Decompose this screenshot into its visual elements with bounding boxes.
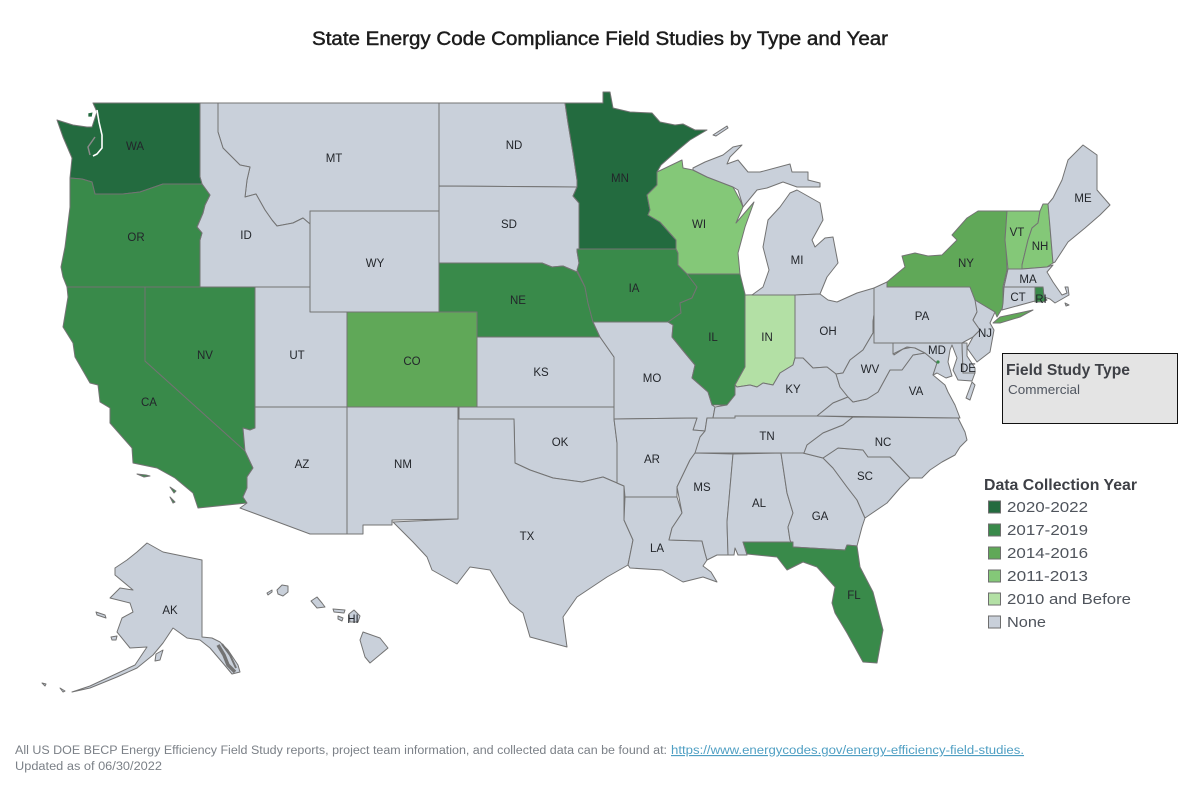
state: Maryland: MD bbox=[928, 345, 946, 357]
state: Missouri bbox=[593, 322, 715, 431]
state: Connecticut bbox=[1002, 287, 1035, 310]
state: Indiana bbox=[735, 294, 795, 387]
title: State Energy Code Compliance Field Studies by Type and Year bbox=[312, 29, 889, 50]
state: Washington: WA bbox=[126, 141, 144, 153]
state: Alabama bbox=[727, 453, 793, 555]
state: Oklahoma: OK bbox=[552, 437, 569, 449]
state: Kansas: KS bbox=[533, 367, 549, 379]
state: Wisconsin bbox=[647, 160, 754, 274]
state: Maryland bbox=[893, 343, 975, 381]
state: Idaho bbox=[197, 103, 310, 287]
state: Connecticut: CT bbox=[1010, 292, 1026, 304]
panel: field study type filter bbox=[1002, 354, 1178, 424]
legend item: 2011-2013: 2011-2013 bbox=[1007, 568, 1088, 585]
state: Utah bbox=[255, 287, 347, 407]
state: Texas: TX bbox=[520, 531, 535, 543]
state: Michigan: MI bbox=[791, 255, 803, 267]
state: Maine bbox=[1048, 145, 1110, 263]
state: New York bbox=[887, 211, 1033, 323]
state: North Carolina bbox=[803, 417, 967, 478]
state: Mississippi bbox=[669, 453, 733, 560]
state: South Carolina bbox=[823, 448, 910, 518]
state: Colorado bbox=[347, 312, 477, 407]
state: California bbox=[63, 287, 253, 508]
state: California: CA bbox=[141, 397, 157, 409]
state: Kentucky bbox=[710, 358, 848, 418]
state: Iowa bbox=[577, 249, 697, 322]
state: Minnesota bbox=[565, 92, 707, 249]
state: Massachusetts: MA bbox=[1019, 274, 1037, 286]
legend item: None bbox=[988, 614, 1046, 631]
state: Nevada bbox=[145, 287, 255, 451]
state: Arizona bbox=[240, 407, 347, 534]
state: New Jersey bbox=[967, 300, 995, 362]
state: Wyoming bbox=[310, 211, 439, 312]
state: Montana bbox=[218, 103, 439, 226]
legend item: 2014-2016: 2014-2016 bbox=[1007, 545, 1088, 562]
choropleth map of US states bbox=[42, 92, 1110, 692]
state: Massachusetts bbox=[1004, 265, 1069, 306]
state: Nebraska: NE bbox=[510, 295, 526, 307]
state: Hawaii bbox=[267, 585, 388, 663]
state: Idaho: ID bbox=[240, 230, 252, 242]
state: Oregon bbox=[61, 178, 210, 287]
state: Wisconsin: WI bbox=[692, 219, 706, 231]
state: Minnesota: MN bbox=[611, 173, 629, 185]
filter value: Commercial bbox=[1008, 383, 1080, 397]
state: Colorado: CO bbox=[403, 356, 421, 368]
state: Florida bbox=[743, 542, 883, 663]
state: Kansas bbox=[477, 337, 614, 407]
state: Florida: FL bbox=[847, 590, 861, 602]
state: Arkansas: AR bbox=[644, 454, 660, 466]
state: Oregon: OR bbox=[127, 232, 145, 244]
state: Arizona: AZ bbox=[295, 459, 309, 471]
state: Oklahoma bbox=[459, 407, 617, 483]
legend heading: Data Collection Year bbox=[984, 477, 1137, 494]
state: Virginia: VA bbox=[909, 386, 924, 398]
state: Nevada: NV bbox=[197, 350, 213, 362]
state: Pennsylvania bbox=[874, 282, 985, 343]
state: West Virginia bbox=[836, 315, 925, 402]
state: Maine: ME bbox=[1074, 193, 1092, 205]
state: Nebraska bbox=[439, 263, 600, 337]
state: Montana: MT bbox=[326, 153, 342, 165]
source link: https://www.energycodes.gov/energy-efficiency-field-studies. bbox=[671, 745, 1024, 757]
state: Vermont: VT bbox=[1010, 227, 1024, 239]
state: Louisiana bbox=[624, 497, 717, 582]
update date: Updated as of 06/30/2022 bbox=[15, 761, 162, 773]
state: Mississippi: MS bbox=[693, 482, 711, 494]
state: Missouri: MO bbox=[643, 373, 661, 385]
state: New Mexico bbox=[347, 407, 458, 534]
state: South Dakota bbox=[439, 186, 579, 272]
state: New Mexico: NM bbox=[394, 459, 412, 471]
state: West Virginia: WV bbox=[861, 364, 880, 376]
state: Ohio bbox=[795, 288, 874, 374]
state: Alaska: AK bbox=[162, 605, 178, 617]
legend item: 2017-2019: 2017-2019 bbox=[1007, 522, 1088, 539]
state: Hawaii: HI bbox=[347, 614, 359, 626]
legend item: None: None bbox=[1007, 614, 1046, 631]
state: Tennessee bbox=[695, 416, 853, 453]
state: Pennsylvania: PA bbox=[915, 311, 930, 323]
footer note bbox=[15, 745, 1024, 773]
state: Indiana: IN bbox=[761, 332, 773, 344]
state: South Dakota: SD bbox=[501, 219, 517, 231]
state: Iowa: IA bbox=[629, 283, 640, 295]
state: Alaska bbox=[42, 543, 240, 692]
source sentence: All US DOE BECP Energy Efficiency Field Study reports, project team information, and collected data can be found at: bbox=[15, 745, 667, 757]
state: Washington bbox=[57, 103, 202, 194]
legend item: 2020-2022: 2020-2022 bbox=[1007, 499, 1088, 516]
state: Louisiana: LA bbox=[650, 543, 664, 555]
state: Alabama: AL bbox=[752, 498, 767, 510]
state: New York: NY bbox=[958, 258, 974, 270]
state: Wyoming: WY bbox=[366, 258, 385, 270]
state: North Dakota bbox=[439, 103, 577, 187]
legend item: 2010 and Before: 2010 and Before bbox=[1007, 591, 1131, 608]
state: New Jersey: NJ bbox=[978, 328, 992, 340]
state: Michigan bbox=[693, 126, 838, 295]
state: Georgia: GA bbox=[812, 511, 829, 523]
state: Texas bbox=[393, 419, 633, 647]
state: New Hampshire bbox=[1022, 204, 1053, 269]
state: Delaware: DE bbox=[960, 363, 976, 375]
state: Rhode Island: RI bbox=[1035, 294, 1047, 306]
state: North Dakota: ND bbox=[506, 140, 522, 152]
state: Delaware bbox=[960, 343, 976, 375]
state: Georgia bbox=[781, 453, 865, 550]
state: Utah: UT bbox=[289, 350, 305, 362]
state: Ohio: OH bbox=[819, 326, 837, 338]
state: Virginia bbox=[817, 353, 975, 418]
state: Illinois bbox=[668, 274, 745, 405]
state: Illinois: IL bbox=[708, 332, 718, 344]
state: South Carolina: SC bbox=[857, 471, 873, 483]
state: Rhode Island bbox=[1035, 287, 1047, 306]
state: North Carolina: NC bbox=[875, 437, 891, 449]
legend: data collection year bbox=[984, 477, 1137, 631]
filter heading: Field Study Type bbox=[1006, 362, 1130, 379]
state: Arkansas bbox=[614, 418, 705, 497]
state: Vermont bbox=[1005, 211, 1040, 269]
state: Kentucky: KY bbox=[785, 384, 801, 396]
state: Tennessee: TN bbox=[759, 431, 775, 443]
state: New Hampshire: NH bbox=[1032, 241, 1048, 253]
